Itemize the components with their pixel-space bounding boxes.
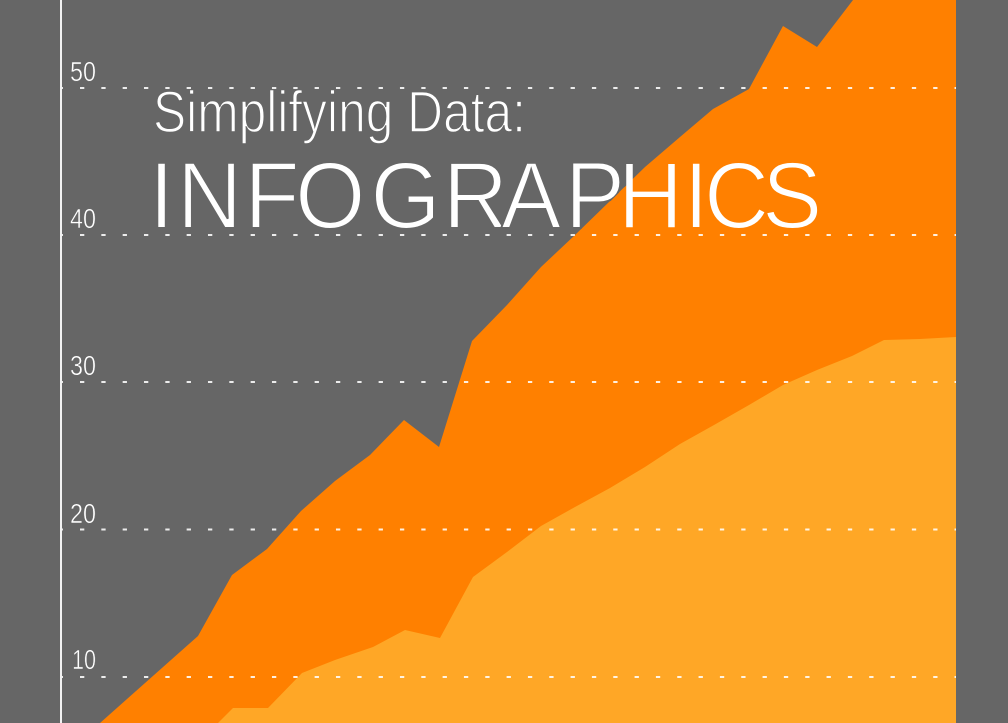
- y axis labels: 30: [70, 350, 96, 381]
- title line 1: Simplifying Data:: [153, 80, 526, 145]
- title line 2: INFOGRAPHICS: [149, 142, 822, 249]
- y axis labels: [70, 56, 96, 675]
- title: [149, 80, 822, 249]
- y axis labels: 20: [70, 498, 96, 529]
- y axis labels: 10: [72, 644, 96, 675]
- y axis labels: 50: [70, 56, 96, 87]
- y axis line: [60, 0, 62, 723]
- gridlines: [62, 88, 956, 677]
- y axis labels: 40: [70, 203, 96, 234]
- area: inner light orange series: [218, 337, 956, 723]
